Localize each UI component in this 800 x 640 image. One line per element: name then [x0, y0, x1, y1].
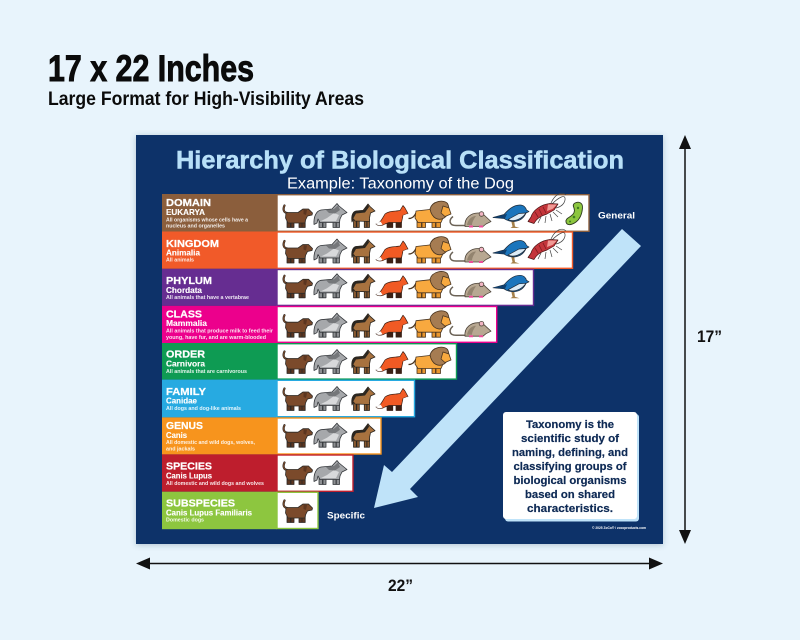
label: General: General — [598, 210, 635, 222]
callout: taxonomy definition: based on shared — [525, 489, 615, 501]
row: species: SPECIES — [166, 460, 212, 472]
row: class: All animals that produce milk to feed their — [166, 328, 274, 334]
row: phylum — [162, 269, 534, 306]
row: family: FAMILY — [166, 386, 206, 398]
animal icons: subspecies — [284, 500, 312, 522]
row: genus: GENUS — [166, 420, 203, 432]
row: species: All domestic and wild dogs and wolves — [166, 481, 264, 487]
animal icons: class — [284, 311, 491, 337]
callout: taxonomy definition: Taxonomy is the — [526, 419, 614, 431]
animal icons: kingdom — [284, 229, 566, 264]
label: 17 inches: 17” — [697, 327, 722, 346]
row: order: ORDER — [166, 348, 205, 360]
row: order — [162, 343, 456, 380]
poster subtitle: Example: Taxonomy of the Dog — [287, 176, 514, 192]
callout: taxonomy definition: classifying groups of — [514, 461, 627, 473]
row: class: Mammalia — [166, 319, 207, 328]
animal icons: phylum — [284, 271, 529, 298]
row: domain: EUKARYA — [166, 208, 205, 217]
row: class — [162, 306, 497, 343]
row: genus: and jackals — [166, 446, 195, 452]
row: subspecies: SUBSPECIES — [166, 498, 235, 510]
row: phylum: Chordata — [166, 286, 202, 295]
row: kingdom: KINGDOM — [166, 238, 219, 250]
animal icons: species — [284, 460, 347, 484]
row: species: Canis Lupus — [166, 471, 212, 480]
row: order: Carnivora — [166, 359, 205, 368]
row: kingdom: Animalia — [166, 249, 200, 258]
animal icons: order — [284, 347, 451, 374]
poster title: Hierarchy of Biological Classification — [176, 146, 624, 174]
row: phylum: PHYLUM — [166, 275, 212, 287]
subheading: Large Format for High-Visibility Areas — [48, 89, 364, 110]
row: kingdom — [162, 229, 572, 269]
row: subspecies: Canis Lupus Familiaris — [166, 508, 252, 517]
callout: taxonomy definition: characteristics. — [527, 503, 613, 515]
animal icons: genus — [284, 423, 375, 447]
animal icons: family — [284, 386, 408, 410]
callout: taxonomy definition — [503, 412, 639, 522]
row: class: young, have fur, and are warm-blooded — [166, 335, 266, 341]
row: domain: nucleus and organelles — [166, 224, 225, 230]
callout: taxonomy definition: scientific study of — [521, 433, 619, 445]
label: 22 inches: 22” — [388, 576, 413, 595]
row: class: CLASS — [166, 308, 202, 320]
row: domain: DOMAIN — [166, 197, 211, 209]
row: genus — [162, 417, 381, 454]
row: subspecies: Domestic dogs — [166, 518, 204, 524]
row: family: Canidae — [166, 396, 197, 405]
row: species — [162, 454, 353, 492]
callout: taxonomy definition: naming, defining, and — [512, 447, 628, 459]
arrow: general to specific — [374, 229, 641, 508]
panel: poster — [136, 135, 663, 544]
callout: taxonomy definition: biological organisms — [514, 475, 626, 487]
arrow: vertical dimension — [679, 135, 691, 544]
row: domain — [162, 193, 589, 232]
label: Specific: Specific — [327, 510, 365, 522]
row: family — [162, 380, 414, 417]
row: family: All dogs and dog-like animals — [166, 406, 241, 412]
row: order: All animals that are carnivorous — [166, 369, 247, 375]
copyright: © 2025 ZoCo® / zocoproducts.com — [592, 526, 646, 530]
arrow: horizontal dimension — [136, 558, 663, 570]
row: subspecies — [162, 492, 318, 529]
row: genus: All domestic and wild dogs, wolves, — [166, 440, 255, 446]
row: kingdom: All animals — [166, 258, 194, 264]
heading: 17 x 22 Inches: 17 x 22 Inches — [48, 48, 254, 89]
row: domain: All organisms whose cells have a — [166, 218, 249, 224]
row: genus: Canis — [166, 431, 187, 440]
animal icons: domain — [284, 193, 583, 228]
row: phylum: All animals that have a vertabrae — [166, 295, 249, 301]
